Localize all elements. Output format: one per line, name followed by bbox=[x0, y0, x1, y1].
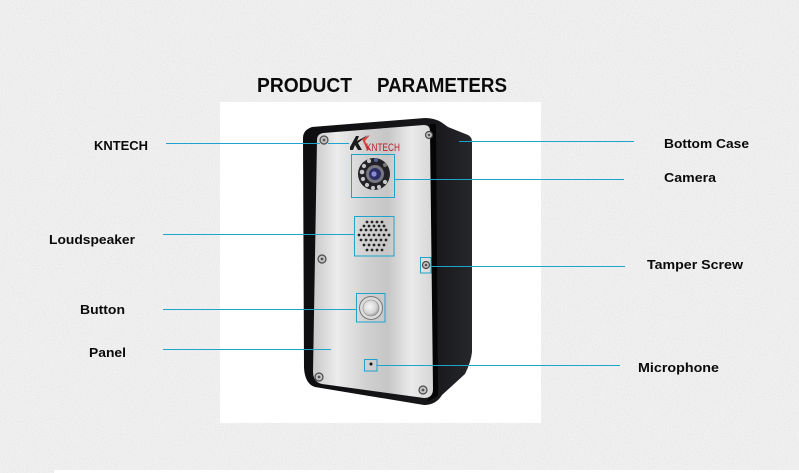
device: door phone bbox=[303, 118, 472, 405]
label: Microphone: Microphone bbox=[638, 360, 719, 375]
label: Tamper Screw: Tamper Screw bbox=[647, 257, 744, 272]
label: Bottom Case: Bottom Case bbox=[664, 136, 749, 151]
logo: KNTECH: KNTECH bbox=[366, 142, 400, 154]
loudspeaker grille bbox=[358, 221, 390, 251]
bottom white strip bbox=[54, 470, 799, 473]
front frame edge bbox=[426, 124, 438, 402]
callout boxes bbox=[352, 154, 431, 371]
panel corner screws bbox=[315, 132, 432, 394]
panel plate bbox=[313, 125, 433, 398]
push button bbox=[360, 296, 382, 320]
title bbox=[257, 75, 507, 97]
label: Button: Button bbox=[80, 302, 125, 317]
label: Loudspeaker: Loudspeaker bbox=[49, 232, 135, 247]
tamper screw bbox=[422, 262, 430, 268]
logo: KNTECH bbox=[350, 135, 400, 154]
camera bbox=[358, 158, 390, 190]
label: KNTECH: KNTECH bbox=[94, 138, 148, 153]
bottom case bbox=[303, 118, 472, 405]
title: PRODUCT bbox=[257, 75, 352, 97]
leader lines bbox=[163, 142, 634, 366]
microphone hole bbox=[370, 362, 372, 366]
title: PARAMETERS bbox=[377, 75, 507, 97]
panel: product photo bbox=[220, 102, 541, 423]
label: Camera: Camera bbox=[664, 170, 717, 185]
label: Panel: Panel bbox=[89, 345, 126, 360]
